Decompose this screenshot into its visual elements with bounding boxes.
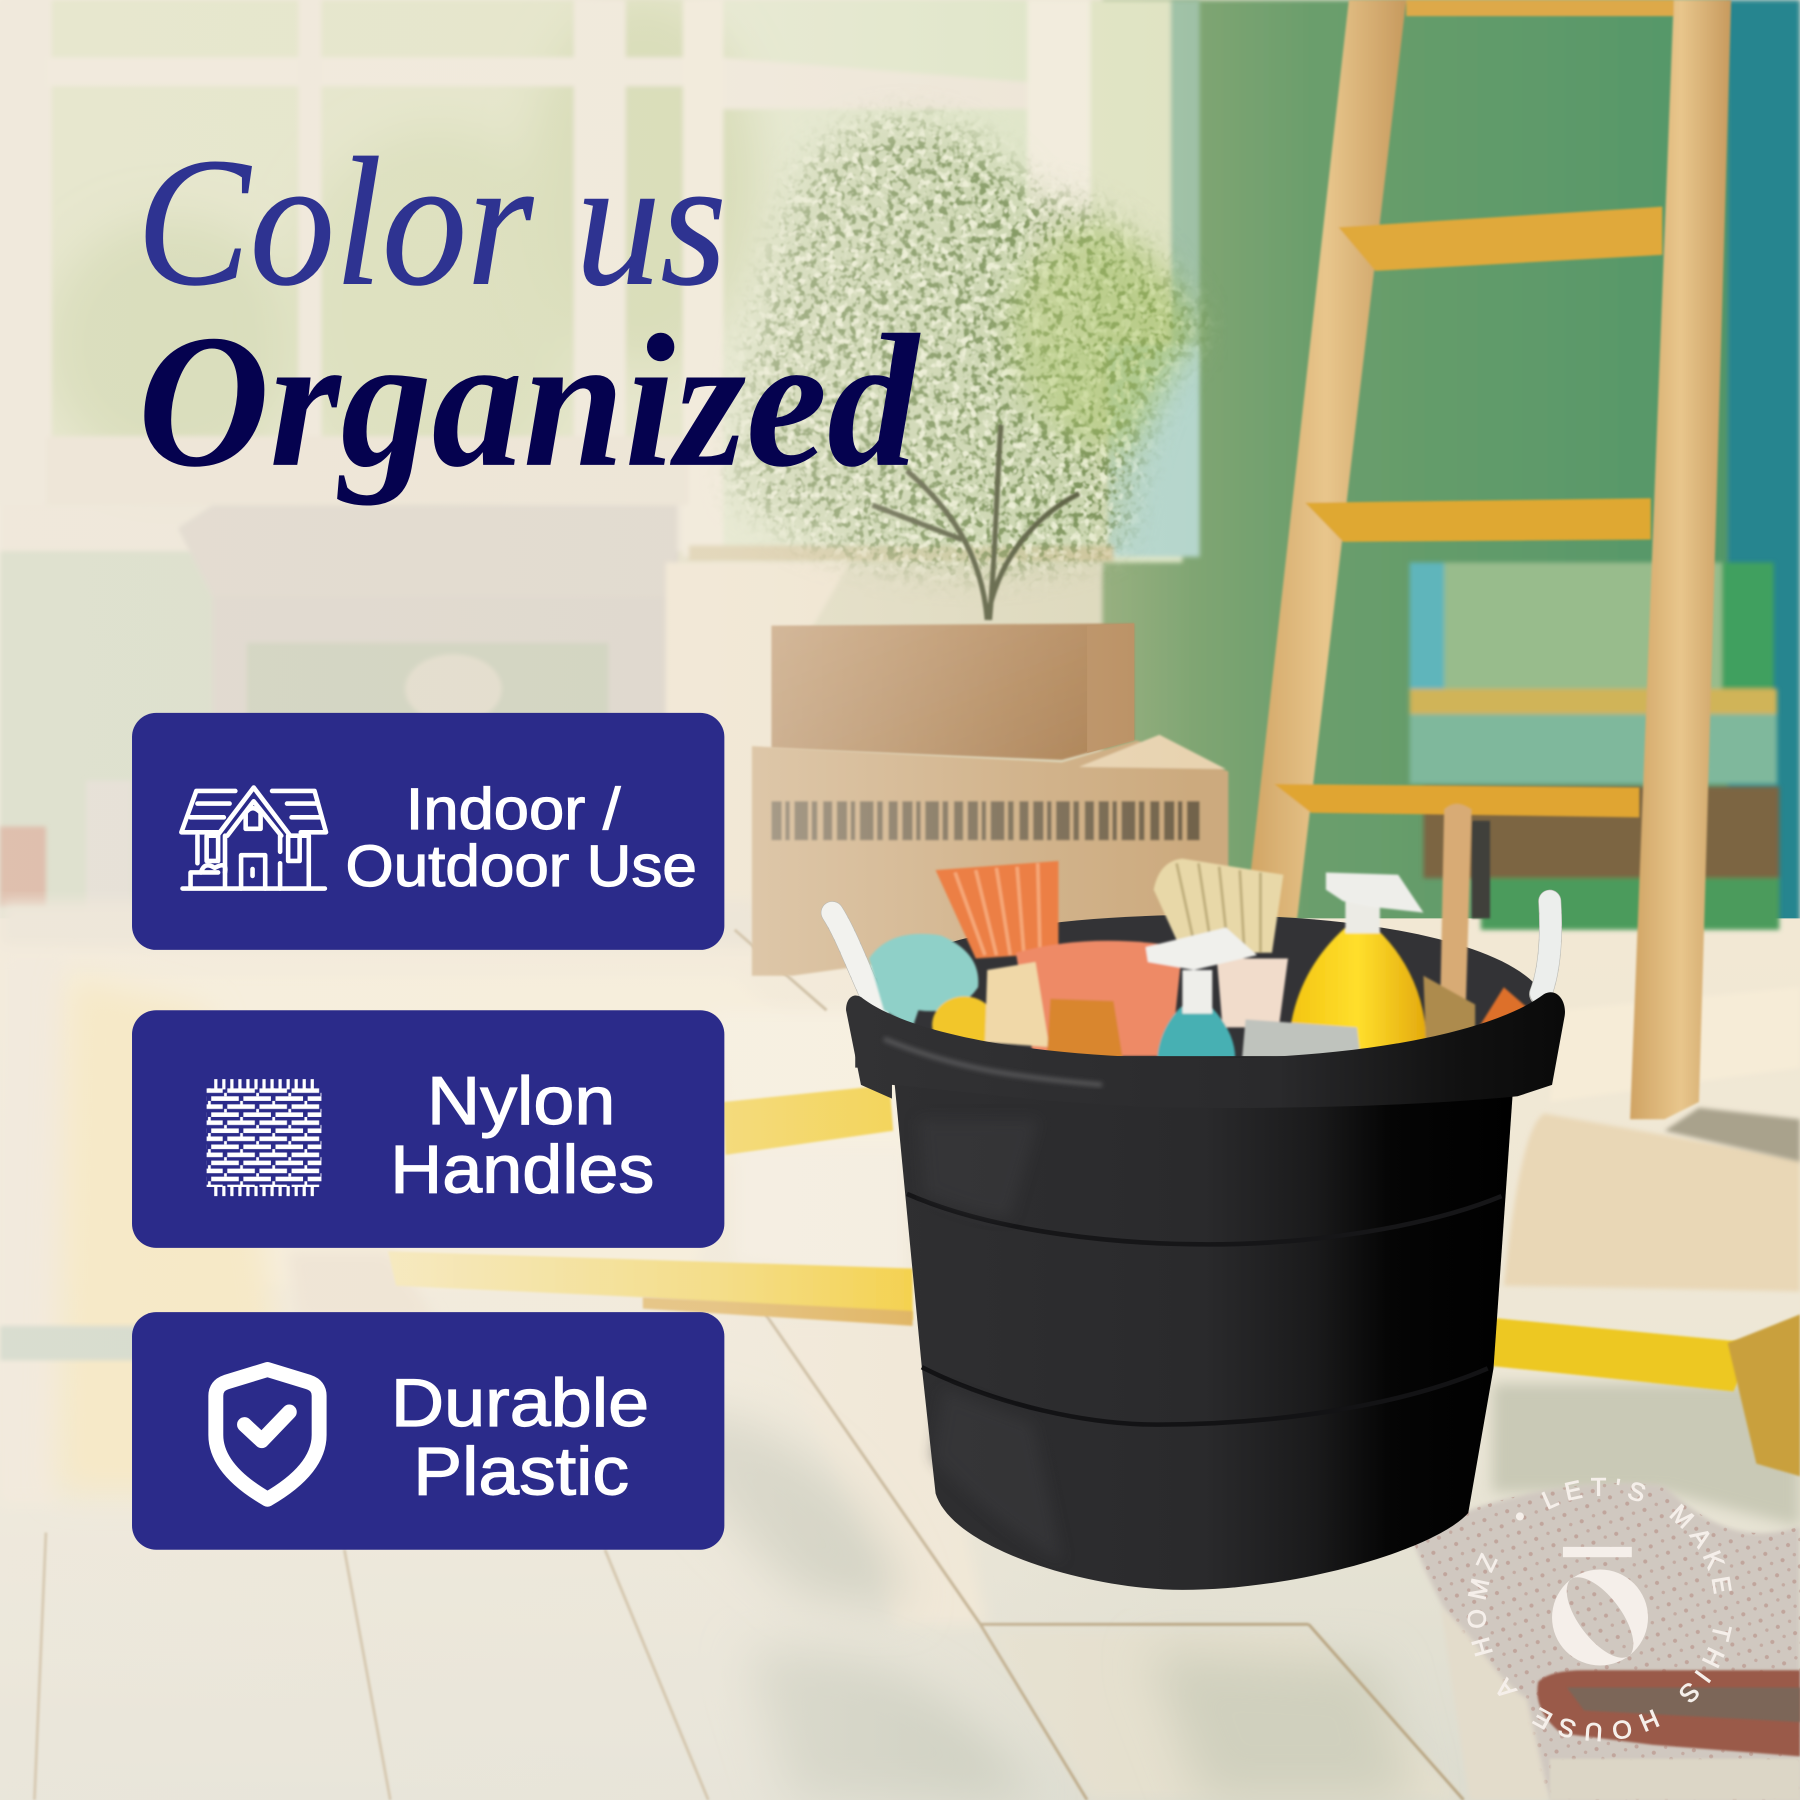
window with garden view [0,0,1200,562]
panel: nylon handles [132,1010,724,1248]
teal spray bottle [1146,928,1257,1058]
heading line one: Color us [137,120,727,324]
icon: shield with check [216,1370,319,1499]
planter side [1087,623,1134,753]
tub back inside wall [855,915,1550,1068]
rope handle left [832,913,878,1010]
plant in cardboard planter [720,102,1212,762]
tub ridge lower [922,1367,1488,1425]
stack of bins behind the ladder [1410,562,1779,930]
grey sponge [1242,1019,1360,1058]
floor with tiles [0,901,1800,1800]
yellow spray bottle [1288,872,1427,1050]
slogan separator dot [1516,1512,1524,1520]
tub ridge upper [907,1194,1502,1244]
heading line two: Organized [138,296,921,507]
logo bar [1563,1547,1632,1557]
cleaning supplies [869,804,1530,1058]
rope handle right [1541,901,1551,994]
label [346,777,697,899]
foliage [720,102,1212,590]
label: Outdoor Use [346,834,697,899]
circular slogan: LET'S MAKE THIS HOUSE A HOMZ [1468,1478,1732,1742]
icon: house [181,788,326,889]
tub reflections [918,1119,1062,1561]
panel: indoor / outdoor use [132,713,724,950]
orange brush [936,861,1058,959]
label [391,1366,649,1510]
trunk and branches [872,425,1079,620]
yellow disc [932,996,996,1054]
label [390,1064,654,1208]
tub rim [846,992,1565,1108]
tub body [892,1056,1515,1590]
cardboard box with printed markings [752,735,1228,976]
orange bucket [1016,941,1182,1056]
dark brush bristles [1472,821,1490,918]
far-side sponges [1423,976,1475,1039]
cream sponge [985,962,1049,1047]
cream brush [1154,859,1283,953]
label: Durable [391,1366,649,1441]
logo letter O [1552,1569,1648,1665]
furniture in the washed room [0,505,849,947]
label: Plastic [413,1435,629,1510]
right orange sponge [1475,987,1530,1033]
panel: durable plastic [132,1312,724,1550]
label: Nylon [427,1064,615,1139]
pink container [1217,959,1288,1027]
orange sponge [1047,999,1123,1058]
heading [137,120,921,507]
product: black tub with cleaning supplies [832,804,1565,1590]
badge: brand seal [1468,1478,1732,1742]
wooden ladder [1246,0,1731,1119]
teal scrubber [869,934,978,1027]
label: Handles [390,1133,654,1208]
rim highlight [884,1039,1102,1085]
white wash over the left of the scene [0,0,1194,1800]
wooden brush handle [1440,804,1472,1039]
planter box [771,623,1134,760]
icon: woven nylon swatch [207,1079,321,1196]
label: Indoor / [406,777,621,842]
